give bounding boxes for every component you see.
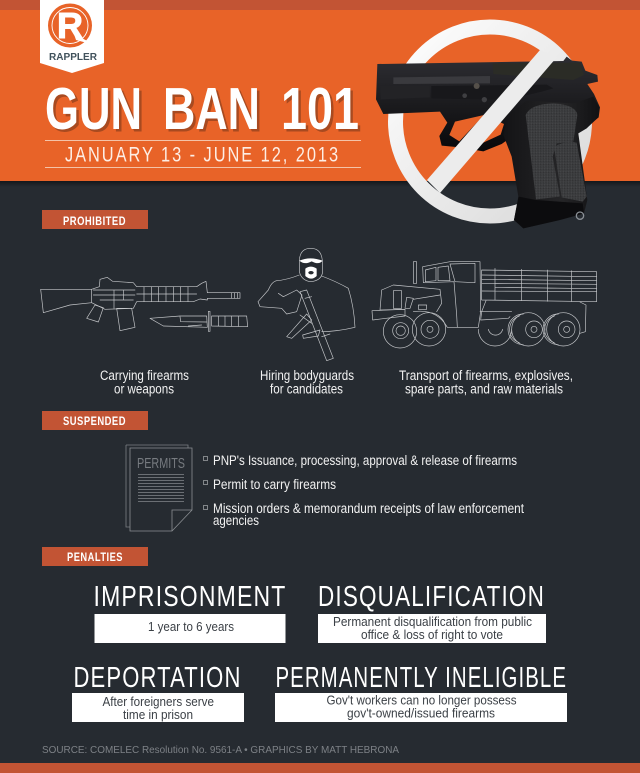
source credit: SOURCE: COMELEC Resolution No. 9561-A • GRAPHICS BY MATT HEBRONA: [42, 744, 399, 756]
badge: penalties: PENALTIES: [67, 552, 123, 564]
icon: bodyguard: [258, 248, 355, 361]
badge: prohibited: PROHIBITED: [63, 216, 126, 228]
icon: knife: [150, 311, 248, 331]
title: BAN: [166, 78, 262, 144]
caption: transport: Transport of firearms, explosives,: [399, 368, 573, 383]
bullet list: [204, 453, 524, 528]
header band: [0, 0, 640, 187]
panel: deportation: time in prison: [123, 707, 193, 722]
title: [45, 76, 362, 144]
logo: Rappler: R: [57, 5, 83, 46]
panel: imprisonment: 1 year to 6 years: [148, 619, 234, 634]
badge: suspended: [42, 411, 148, 430]
panel: deportation: After foreigners serve: [102, 694, 214, 709]
bullet list: PNP's Issuance, processing, approval & release of firearms: [213, 453, 517, 468]
caption: transport: spare parts, and raw materials: [405, 382, 563, 396]
icon: military truck: [372, 262, 597, 348]
caption: firearms: or weapons: [114, 382, 174, 396]
logo: Rappler: [40, 0, 104, 73]
caption: bodyguards: Hiring bodyguards: [260, 368, 354, 383]
icon: permit document: PERMITS: [137, 455, 185, 472]
caption: firearms: Carrying firearms: [100, 368, 189, 383]
panel: deportation: DEPORTATION: [74, 662, 242, 694]
panel: disqualification: office & loss of right to vote: [361, 627, 503, 642]
panel: disqualification: DISQUALIFICATION: [318, 581, 545, 613]
date range: JANUARY 13 - JUNE 12, 2013: [65, 144, 340, 166]
icon: rifle: [41, 277, 240, 331]
title: GUN: [45, 76, 142, 142]
caption: transport: [399, 368, 573, 396]
panel: disqualification: [318, 581, 546, 643]
panel: imprisonment: [94, 581, 286, 643]
footer band: [0, 763, 640, 773]
badge: prohibited: [42, 210, 148, 229]
title: GUN: [48, 78, 144, 144]
logo: Rappler: RAPPLER: [49, 51, 97, 63]
panel: permanently ineligible: gov't-owned/issued firearms: [347, 706, 495, 720]
icon: permit document: [126, 445, 192, 531]
title: 101: [284, 78, 362, 144]
badge: suspended: SUSPENDED: [63, 416, 126, 428]
panel: suspended items: [126, 445, 524, 531]
bullet list: Mission orders & memorandum receipts of law enforcement: [213, 501, 524, 516]
caption: bodyguards: for candidates: [270, 382, 343, 396]
panel: permanently ineligible: [275, 662, 567, 722]
panel: disqualification: Permanent disqualification from public: [333, 614, 532, 629]
title: BAN: [163, 76, 260, 142]
caption: firearms: [100, 368, 189, 396]
panel: deportation: [72, 662, 244, 722]
bullet list: Permit to carry firearms: [213, 477, 336, 492]
caption: bodyguards: [260, 368, 354, 396]
panel: imprisonment: IMPRISONMENT: [94, 581, 286, 613]
bullet list: agencies: [213, 513, 259, 528]
title: 101: [281, 76, 359, 142]
badge: penalties: [42, 547, 148, 566]
icon: prohibited sign over handgun: [376, 27, 600, 228]
panel: permanently ineligible: Gov't workers can no longer possess: [326, 692, 517, 708]
panel: prohibited items: [41, 248, 597, 396]
